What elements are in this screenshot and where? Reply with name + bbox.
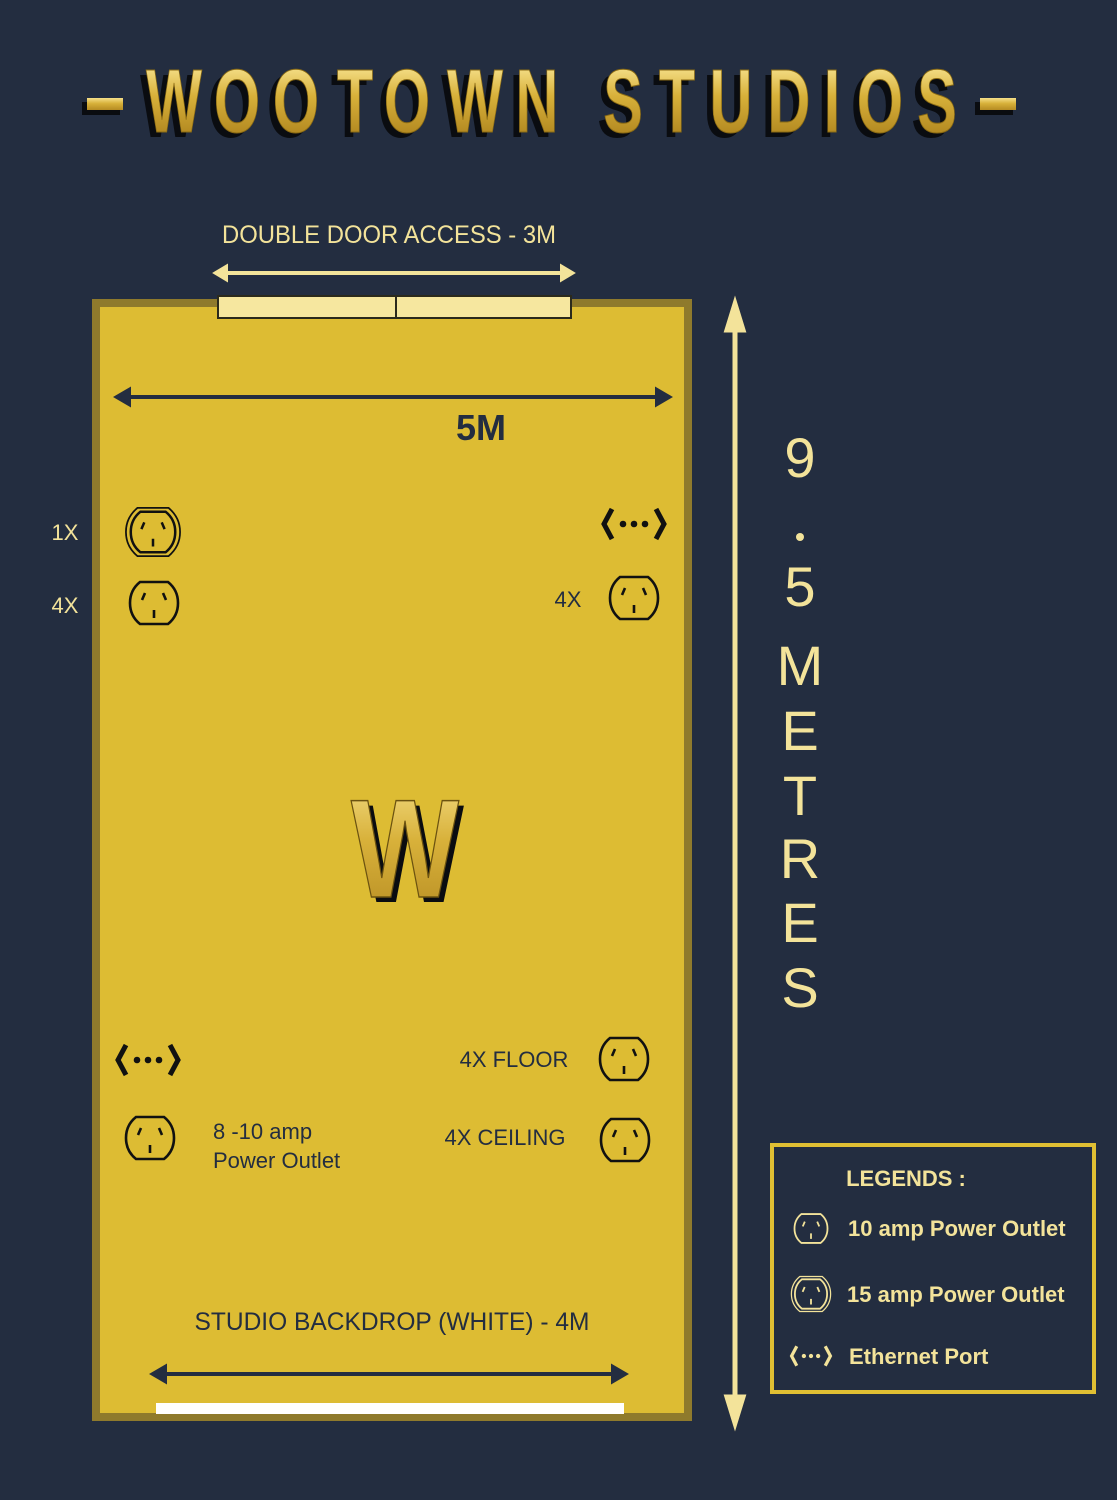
door [218,296,571,318]
title: O [208,57,254,157]
title: D [762,57,804,157]
legend item ethernet: Ethernet Port [849,1344,989,1369]
door label: DOUBLE DOOR ACCESS - 3M [222,221,556,249]
logo W: W [356,775,464,932]
icon: outlet floor [600,1038,648,1080]
title: I [818,57,834,157]
title: O [214,52,260,152]
label 9.5 METRES: S [781,956,819,1019]
title: I [824,52,840,152]
icon: outlet right [610,577,658,619]
label 9.5 METRES: T [783,764,817,827]
title: O [378,57,424,157]
icon: ethernet bottom-left [118,1045,178,1075]
title: U [710,52,752,152]
title: S [603,52,643,152]
title: T [659,52,695,152]
title: N [516,52,558,152]
label 9.5 METRES: R [780,827,820,890]
label 9.5 METRES [777,426,823,1019]
title: O [384,52,430,152]
icon: 15 amp outlet top-left [126,508,180,556]
legend [772,1145,1094,1392]
labels 1X 4X: 1X [52,520,79,545]
label right 4X: 4X [555,587,582,612]
icon: outlet ceiling [601,1119,649,1161]
title: S [597,57,637,157]
panel: room: 4X [52,593,79,618]
title: D [768,52,810,152]
icon: outlet bottom-left [126,1117,174,1159]
legend item 15 amp [791,1276,1065,1312]
legend item 10 amp: 10 amp Power Outlet [848,1216,1066,1241]
logo W: W [351,770,459,927]
title: T [653,57,689,157]
title: O [273,52,319,152]
title: S [917,52,957,152]
title: T [331,57,367,157]
title: W [447,52,503,152]
label 4X floor: 4X FLOOR [460,1047,568,1072]
label 9.5 METRES: E [781,891,819,954]
legend item 10 amp [794,1214,1066,1243]
title: O [857,52,903,152]
title: O [267,57,313,157]
panel: room [52,296,688,1417]
label 9.5 METRES: E [781,699,819,762]
title: U [704,57,746,157]
label 4X ceiling: 4X CEILING [444,1125,566,1150]
title: S [911,57,951,157]
label 9.5 METRES: 9 [784,426,816,489]
title: O [851,57,897,157]
title: W [140,57,196,157]
legend item 15 amp: 15 amp Power Outlet [847,1282,1065,1307]
label 9.5 METRES: M [777,634,823,697]
arrow: door width [216,267,572,279]
arrow: 5M [117,390,669,404]
title: N [510,57,552,157]
icon: ethernet top-right [604,509,664,539]
legend: LEGENDS : [846,1166,966,1191]
title [82,52,1016,157]
icon: 10 amp outlet top-left [130,582,178,624]
label 9.5 METRES: 5 [784,555,816,618]
panel: room: Power Outlet [213,1148,340,1173]
arrow: backdrop [153,1367,625,1381]
title: T [337,52,373,152]
arrow: height [727,304,743,1423]
label backdrop: STUDIO BACKDROP (WHITE) - 4M [194,1308,590,1336]
title: W [441,57,497,157]
backdrop bar [156,1403,624,1414]
label 5M: 5M [456,407,506,448]
label 8-10 amp: 8 -10 amp [213,1119,312,1144]
title: W [146,52,202,152]
